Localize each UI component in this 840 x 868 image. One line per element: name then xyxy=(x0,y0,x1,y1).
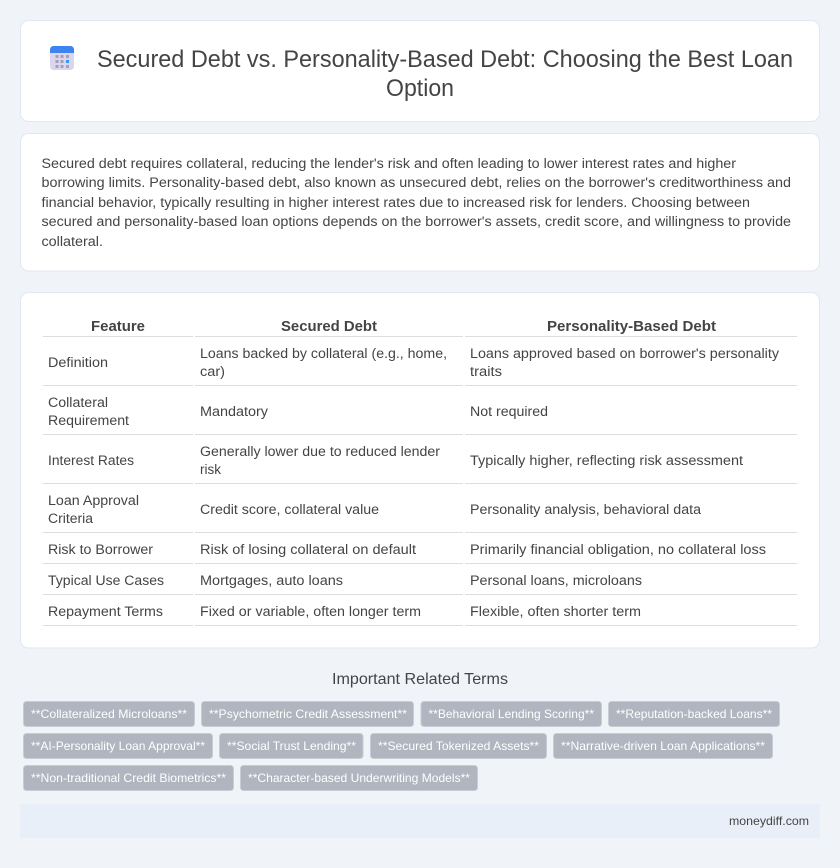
row: risk to borrower: Risk of losing collateral on default xyxy=(200,542,416,558)
description text: secured and personality-based loan options depends on the borrower's assets, credit score, and willingness to provide xyxy=(42,214,791,230)
description text: Secured debt requires collateral, reducing the lender's risk and often leading to lower interest rates and higher xyxy=(42,156,736,172)
row: collateral requirement xyxy=(48,395,548,429)
related term tags: **AI-Personality Loan Approval** xyxy=(31,739,205,753)
title: Secured Debt vs. Personality-Based Debt: Choosing the Best Loan xyxy=(97,46,793,73)
panel: comparison table xyxy=(20,292,820,648)
row: risk to borrower: Primarily financial obligation, no collateral loss xyxy=(470,542,766,558)
panel: description xyxy=(20,134,820,271)
row: repayment terms: Fixed or variable, often longer term xyxy=(200,604,421,620)
table header row xyxy=(91,318,716,335)
title: Option xyxy=(386,75,454,102)
row: repayment terms: Repayment Terms xyxy=(48,604,163,620)
related term tags xyxy=(24,702,780,790)
row: typical use cases: Typical Use Cases xyxy=(48,573,164,589)
row: collateral requirement: Not required xyxy=(470,404,548,420)
row: loan approval criteria: Criteria xyxy=(48,511,93,527)
row: interest rates: Interest Rates xyxy=(48,453,134,469)
row: interest rates: risk xyxy=(200,462,222,478)
row: repayment terms xyxy=(48,604,641,620)
row: collateral requirement: Collateral xyxy=(48,395,108,411)
row: typical use cases: Personal loans, microloans xyxy=(470,573,642,589)
related term tags: **Character-based Underwriting Models** xyxy=(248,771,470,785)
row: typical use cases: Mortgages, auto loans xyxy=(200,573,343,589)
row: collateral requirement: Mandatory xyxy=(200,404,269,420)
row: definition: Loans backed by collateral (e.g., home, xyxy=(200,346,447,362)
row: typical use cases xyxy=(48,573,642,589)
description text xyxy=(42,156,791,250)
row: loan approval criteria xyxy=(48,493,701,527)
row: definition: car) xyxy=(200,364,225,380)
row: loan approval criteria: Loan Approval xyxy=(48,493,139,509)
row: risk to borrower xyxy=(48,542,766,558)
description text: financial behavior, typically resulting in higher interest rates due to increased risk for lenders. Choosing between xyxy=(42,195,750,211)
row: definition xyxy=(48,346,780,380)
related term tags: **Narrative-driven Loan Applications** xyxy=(561,739,765,753)
related term tags: **Psychometric Credit Assessment** xyxy=(209,707,407,721)
row: interest rates: Generally lower due to reduced lender xyxy=(200,444,440,460)
related term tags: **Non-traditional Credit Biometrics** xyxy=(31,771,226,785)
related term tags: **Secured Tokenized Assets** xyxy=(378,739,539,753)
row: interest rates: Typically higher, reflecting risk assessment xyxy=(470,453,743,469)
panel: header xyxy=(20,20,820,122)
related term tags: **Reputation-backed Loans** xyxy=(616,707,772,721)
description text: collateral. xyxy=(42,234,103,250)
table header row: Personality-Based Debt xyxy=(547,318,716,335)
row: definition: Definition xyxy=(48,355,108,371)
icon: calendar xyxy=(50,46,74,70)
table header row: Feature xyxy=(91,318,145,335)
row: interest rates xyxy=(48,444,743,478)
related term tags: **Social Trust Lending** xyxy=(227,739,356,753)
row: loan approval criteria: Credit score, collateral value xyxy=(200,502,379,518)
related term tags: **Collateralized Microloans** xyxy=(31,707,187,721)
footer xyxy=(20,804,820,838)
row: definition: Loans approved based on borrower's personality xyxy=(470,346,780,362)
title xyxy=(97,46,793,102)
row: collateral requirement: Requirement xyxy=(48,413,129,429)
row: risk to borrower: Risk to Borrower xyxy=(48,542,153,558)
row: loan approval criteria: Personality analysis, behavioral data xyxy=(470,502,701,518)
table header row: Secured Debt xyxy=(281,318,377,335)
footer: moneydiff.com xyxy=(729,814,809,828)
related term tags: **Behavioral Lending Scoring** xyxy=(428,707,594,721)
description text: borrowing limits. Personality-based debt, also known as unsecured debt, relies on the borrower's creditworthiness and xyxy=(42,175,791,191)
row: repayment terms: Flexible, often shorter term xyxy=(470,604,641,620)
heading: important related terms: Important Related Terms xyxy=(332,671,508,688)
row: definition: traits xyxy=(470,364,502,380)
